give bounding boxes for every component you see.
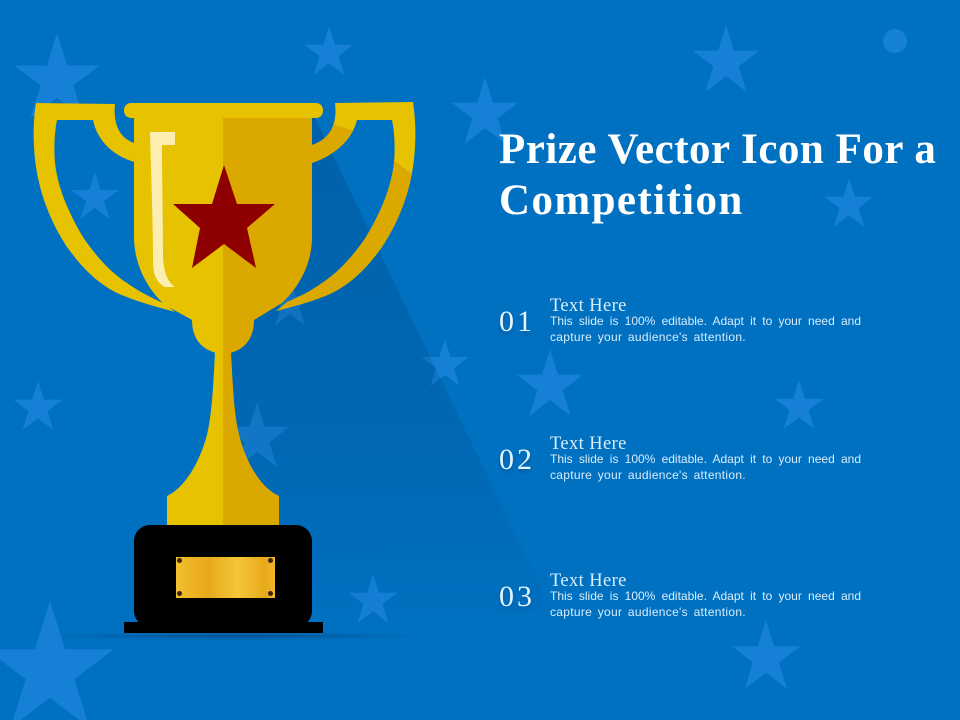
item heading: Text Here xyxy=(550,296,627,316)
stem xyxy=(167,352,279,525)
title: Prize Vector Icon For a xyxy=(499,126,936,173)
item text xyxy=(550,314,861,344)
item text: This slide is 100% editable. Adapt it to your need and xyxy=(550,589,861,603)
item text xyxy=(550,452,861,482)
rim xyxy=(124,103,323,118)
title xyxy=(499,126,936,224)
ground shadow xyxy=(45,632,425,640)
number 02: 02 xyxy=(499,443,535,476)
cup right half xyxy=(223,118,312,353)
number 03: 03 xyxy=(499,580,535,613)
trophy xyxy=(34,102,420,633)
item heading: Text Here xyxy=(550,571,627,591)
item text: capture your audience's attention. xyxy=(550,330,746,344)
cup highlight xyxy=(150,132,175,287)
number 01: 01 xyxy=(499,305,535,338)
left handle xyxy=(34,103,175,312)
item text xyxy=(550,589,861,619)
item heading: Text Here xyxy=(550,434,627,454)
item text: This slide is 100% editable. Adapt it to your need and xyxy=(550,314,861,328)
list item 01 xyxy=(499,296,861,344)
right handle xyxy=(276,102,416,311)
item text: capture your audience's attention. xyxy=(550,605,746,619)
item text: capture your audience's attention. xyxy=(550,468,746,482)
item text: This slide is 100% editable. Adapt it to your need and xyxy=(550,452,861,466)
star emblem xyxy=(173,165,275,268)
list item 02 xyxy=(499,434,861,482)
list item 03 xyxy=(499,571,861,619)
long shadow of trophy xyxy=(223,118,552,628)
name plate xyxy=(176,557,275,598)
base xyxy=(124,525,323,633)
cup left half xyxy=(134,118,224,353)
title: Competition xyxy=(499,177,744,224)
